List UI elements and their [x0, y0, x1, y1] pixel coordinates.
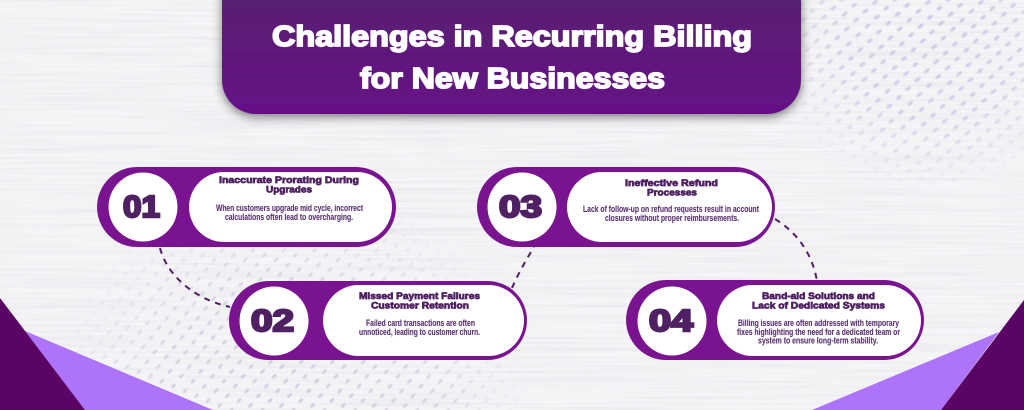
- text panel 04: fixes highlighting the need for a dedicated team or: [737, 327, 900, 337]
- number badge 04: [638, 286, 706, 356]
- number badge 01: 01: [123, 189, 160, 224]
- text panel 02: [323, 285, 524, 356]
- number badge 03: [488, 172, 556, 242]
- title: Challenges in Recurring Billing: [272, 21, 752, 53]
- connector: 02 to 03: [512, 247, 534, 288]
- text panel 04: system to ensure long-term stability.: [758, 336, 878, 346]
- text panel 03: Processes: [647, 188, 697, 198]
- decorative triangles: bottom left: [0, 298, 213, 410]
- text panel 01: When customers upgrade mid cycle, incorrect: [216, 203, 363, 213]
- number badge 02: [240, 286, 308, 356]
- text panel 02: Missed Payment Failures: [359, 291, 480, 302]
- card 04: [626, 280, 924, 360]
- text panel 04: Billing issues are often addressed with temporary: [738, 318, 900, 328]
- text panel 03: [567, 172, 772, 242]
- text panel 04: Lack of Dedicated Systems: [752, 300, 885, 312]
- text panel 01: Upgrades: [266, 184, 312, 196]
- number badge 03: 03: [499, 189, 542, 224]
- text panel 04: Band-aid Solutions and: [762, 291, 875, 302]
- card 02: [229, 281, 527, 360]
- card 01: [97, 167, 396, 247]
- title: for New Businesses: [360, 63, 665, 95]
- text panel 04: [717, 285, 921, 356]
- decorative triangles: bottom right: [812, 300, 1024, 410]
- text panel 02: Customer Retention: [371, 300, 469, 312]
- connector: 03 to 04: [775, 219, 817, 281]
- number badge 04: 04: [649, 303, 694, 338]
- title banner: [222, 0, 801, 114]
- text panel 02: Failed card transactions are often: [366, 318, 475, 328]
- text panel 03: closures without proper reimbursements.: [605, 213, 739, 223]
- connector: 01 to 02: [160, 248, 230, 307]
- number badge 02: 02: [251, 303, 294, 338]
- text panel 03: Lack of follow-up on refund requests result in account: [583, 204, 759, 214]
- text panel 01: [189, 172, 392, 242]
- text panel 01: Inaccurate Prorating During: [219, 175, 359, 186]
- text panel 03: Ineffective Refund: [625, 178, 718, 189]
- card 03: [477, 167, 775, 247]
- number badge 01: [108, 172, 178, 242]
- text panel 02: unnoticed, leading to customer churn.: [359, 327, 480, 337]
- text panel 01: calculations often lead to overcharging.: [225, 212, 353, 222]
